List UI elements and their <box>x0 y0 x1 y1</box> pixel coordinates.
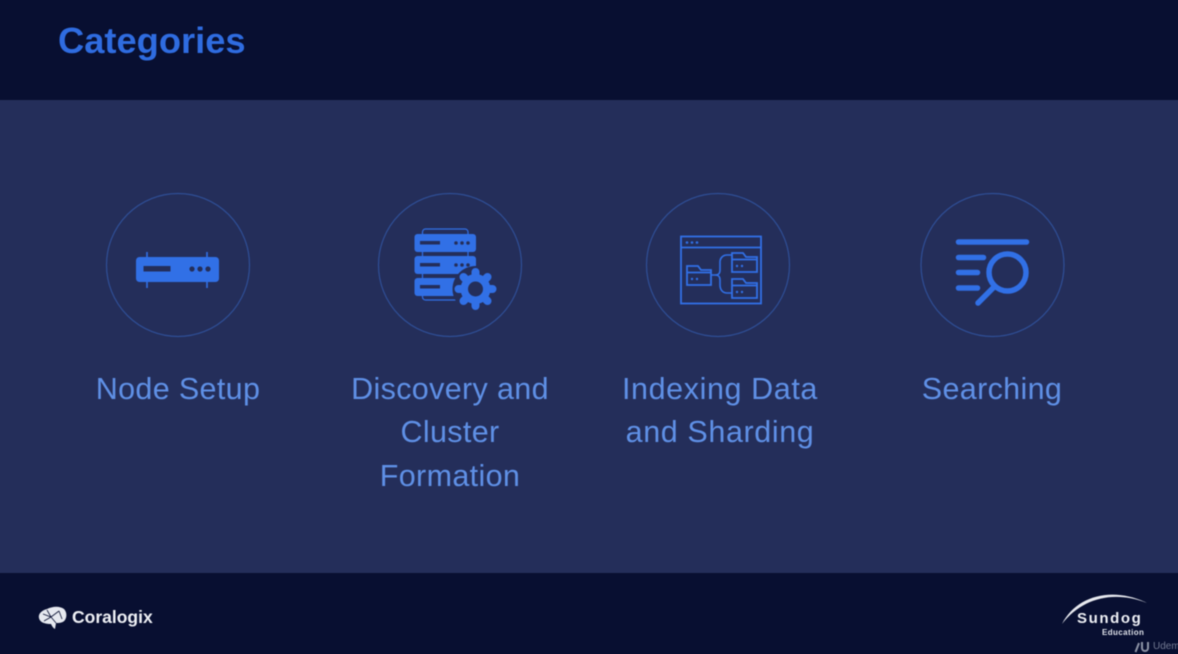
icon: node setup <box>106 194 250 336</box>
icon: search list <box>921 194 1064 336</box>
label: discovery and cluster formation: Discovery and <box>351 372 549 406</box>
logo: sundog arc <box>1062 595 1147 624</box>
logo: udemy mark <box>1136 642 1148 652</box>
sundog education text: Education <box>1102 628 1144 636</box>
coralogix wordmark: Coralogix <box>72 607 153 627</box>
label: node setup: Node Setup <box>96 372 260 406</box>
title: Categories <box>58 20 246 61</box>
logo: coralogix brain <box>39 607 66 629</box>
label: indexing data and sharding: Indexing Data <box>622 372 818 406</box>
label: discovery and cluster formation: Cluster <box>400 415 500 449</box>
label: searching: Searching <box>922 372 1062 406</box>
label: indexing data and sharding: and Sharding <box>626 415 814 449</box>
icon: indexing window with folders <box>646 194 790 336</box>
label: discovery and cluster formation: Formation <box>380 458 520 492</box>
sundog wordmark: Sundog <box>1077 610 1142 627</box>
icon: server with gear <box>378 194 522 336</box>
label: indexing data and sharding <box>622 372 818 450</box>
panel: main content band <box>0 100 1178 573</box>
label: discovery and cluster formation <box>351 372 549 492</box>
